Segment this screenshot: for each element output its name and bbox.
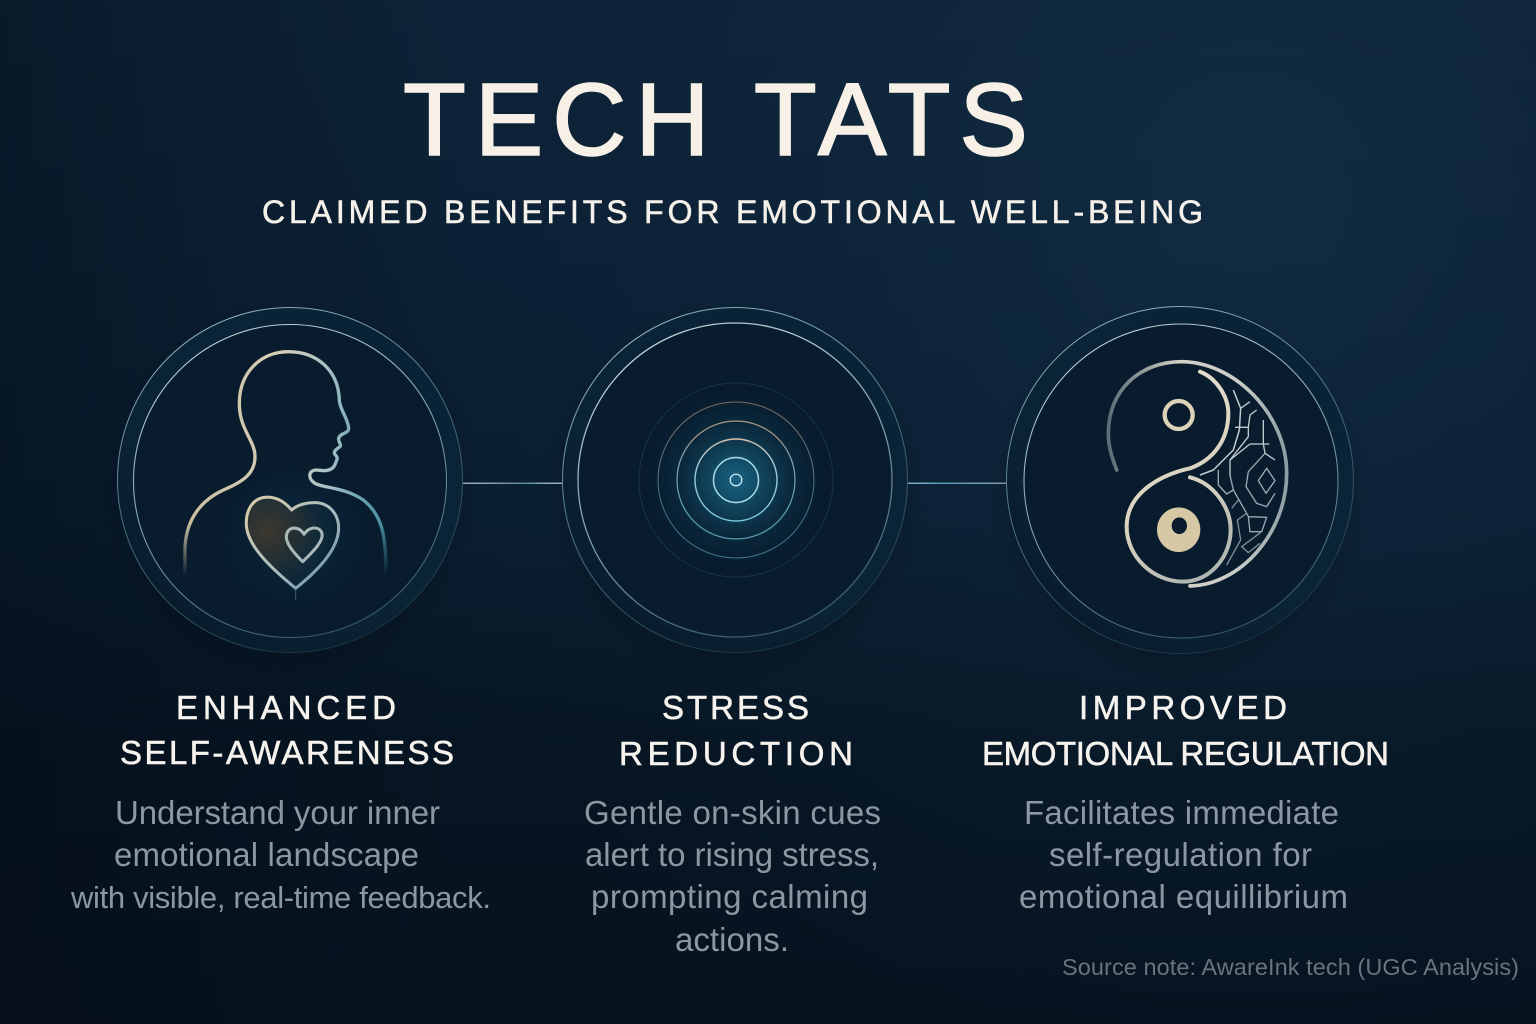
text: self-awareness description: Understand your inner	[115, 794, 440, 831]
subtitle: CLAIMED BENEFITS FOR EMOTIONAL WELL-BEING	[262, 194, 1203, 230]
text: stress reduction description: Gentle on-skin cues	[584, 794, 881, 831]
text: emotional regulation description: self-regulation for	[1049, 836, 1312, 873]
heading: stress reduction: STRESS	[662, 689, 809, 726]
icon: yin-yang solid dot	[1157, 507, 1200, 552]
heading: enhanced self-awareness: SELF-AWARENESS	[120, 734, 454, 771]
panel: enhanced self-awareness	[70, 298, 491, 915]
heading: enhanced self-awareness	[120, 689, 454, 771]
heading: enhanced self-awareness: ENHANCED	[176, 689, 396, 726]
icon: circuit lines	[1200, 390, 1275, 565]
icon: concentric pulse rings	[639, 383, 833, 577]
panel: stress reduction	[543, 298, 927, 958]
heading: improved emotional regulation: EMOTIONAL REGULATION	[982, 735, 1389, 772]
text: self-awareness description	[70, 794, 491, 915]
icon: person outline with heart	[185, 352, 386, 603]
title: TECH TATS	[403, 62, 1028, 177]
text: self-awareness description: with visible, real-time feedback.	[70, 880, 491, 915]
text: stress reduction description: actions.	[675, 921, 789, 958]
text: stress reduction description: alert to rising stress,	[585, 836, 879, 873]
text: emotional regulation description: Facilitates immediate	[1024, 794, 1339, 831]
icon ring: emotional regulation	[988, 298, 1372, 682]
icon: inner heart	[286, 528, 322, 562]
text: emotional regulation description: emotional equillibrium	[1019, 878, 1348, 915]
text: emotional regulation description	[1019, 794, 1348, 915]
text: stress reduction description: prompting calming	[591, 878, 868, 915]
connector: stress reduction to emotional regulation	[908, 483, 1007, 484]
panel: improved emotional regulation	[982, 298, 1389, 915]
heading: improved emotional regulation: IMPROVED	[1079, 689, 1287, 726]
icon ring: stress reduction	[543, 298, 927, 682]
source note: Source note: AwareInk tech (UGC Analysis)	[1062, 954, 1519, 980]
text: self-awareness description: emotional landscape	[114, 836, 419, 873]
icon: yin-yang with circuit pattern	[1108, 362, 1287, 586]
icon: outer heart	[246, 497, 339, 588]
icon: yin-yang small ring	[1165, 401, 1193, 429]
text: stress reduction description	[584, 794, 881, 958]
icon ring: self-awareness	[98, 298, 482, 682]
connector: self-awareness to stress reduction	[463, 483, 563, 484]
heading: improved emotional regulation	[982, 689, 1389, 772]
heading: stress reduction	[619, 689, 853, 772]
heading: stress reduction: REDUCTION	[619, 735, 853, 772]
